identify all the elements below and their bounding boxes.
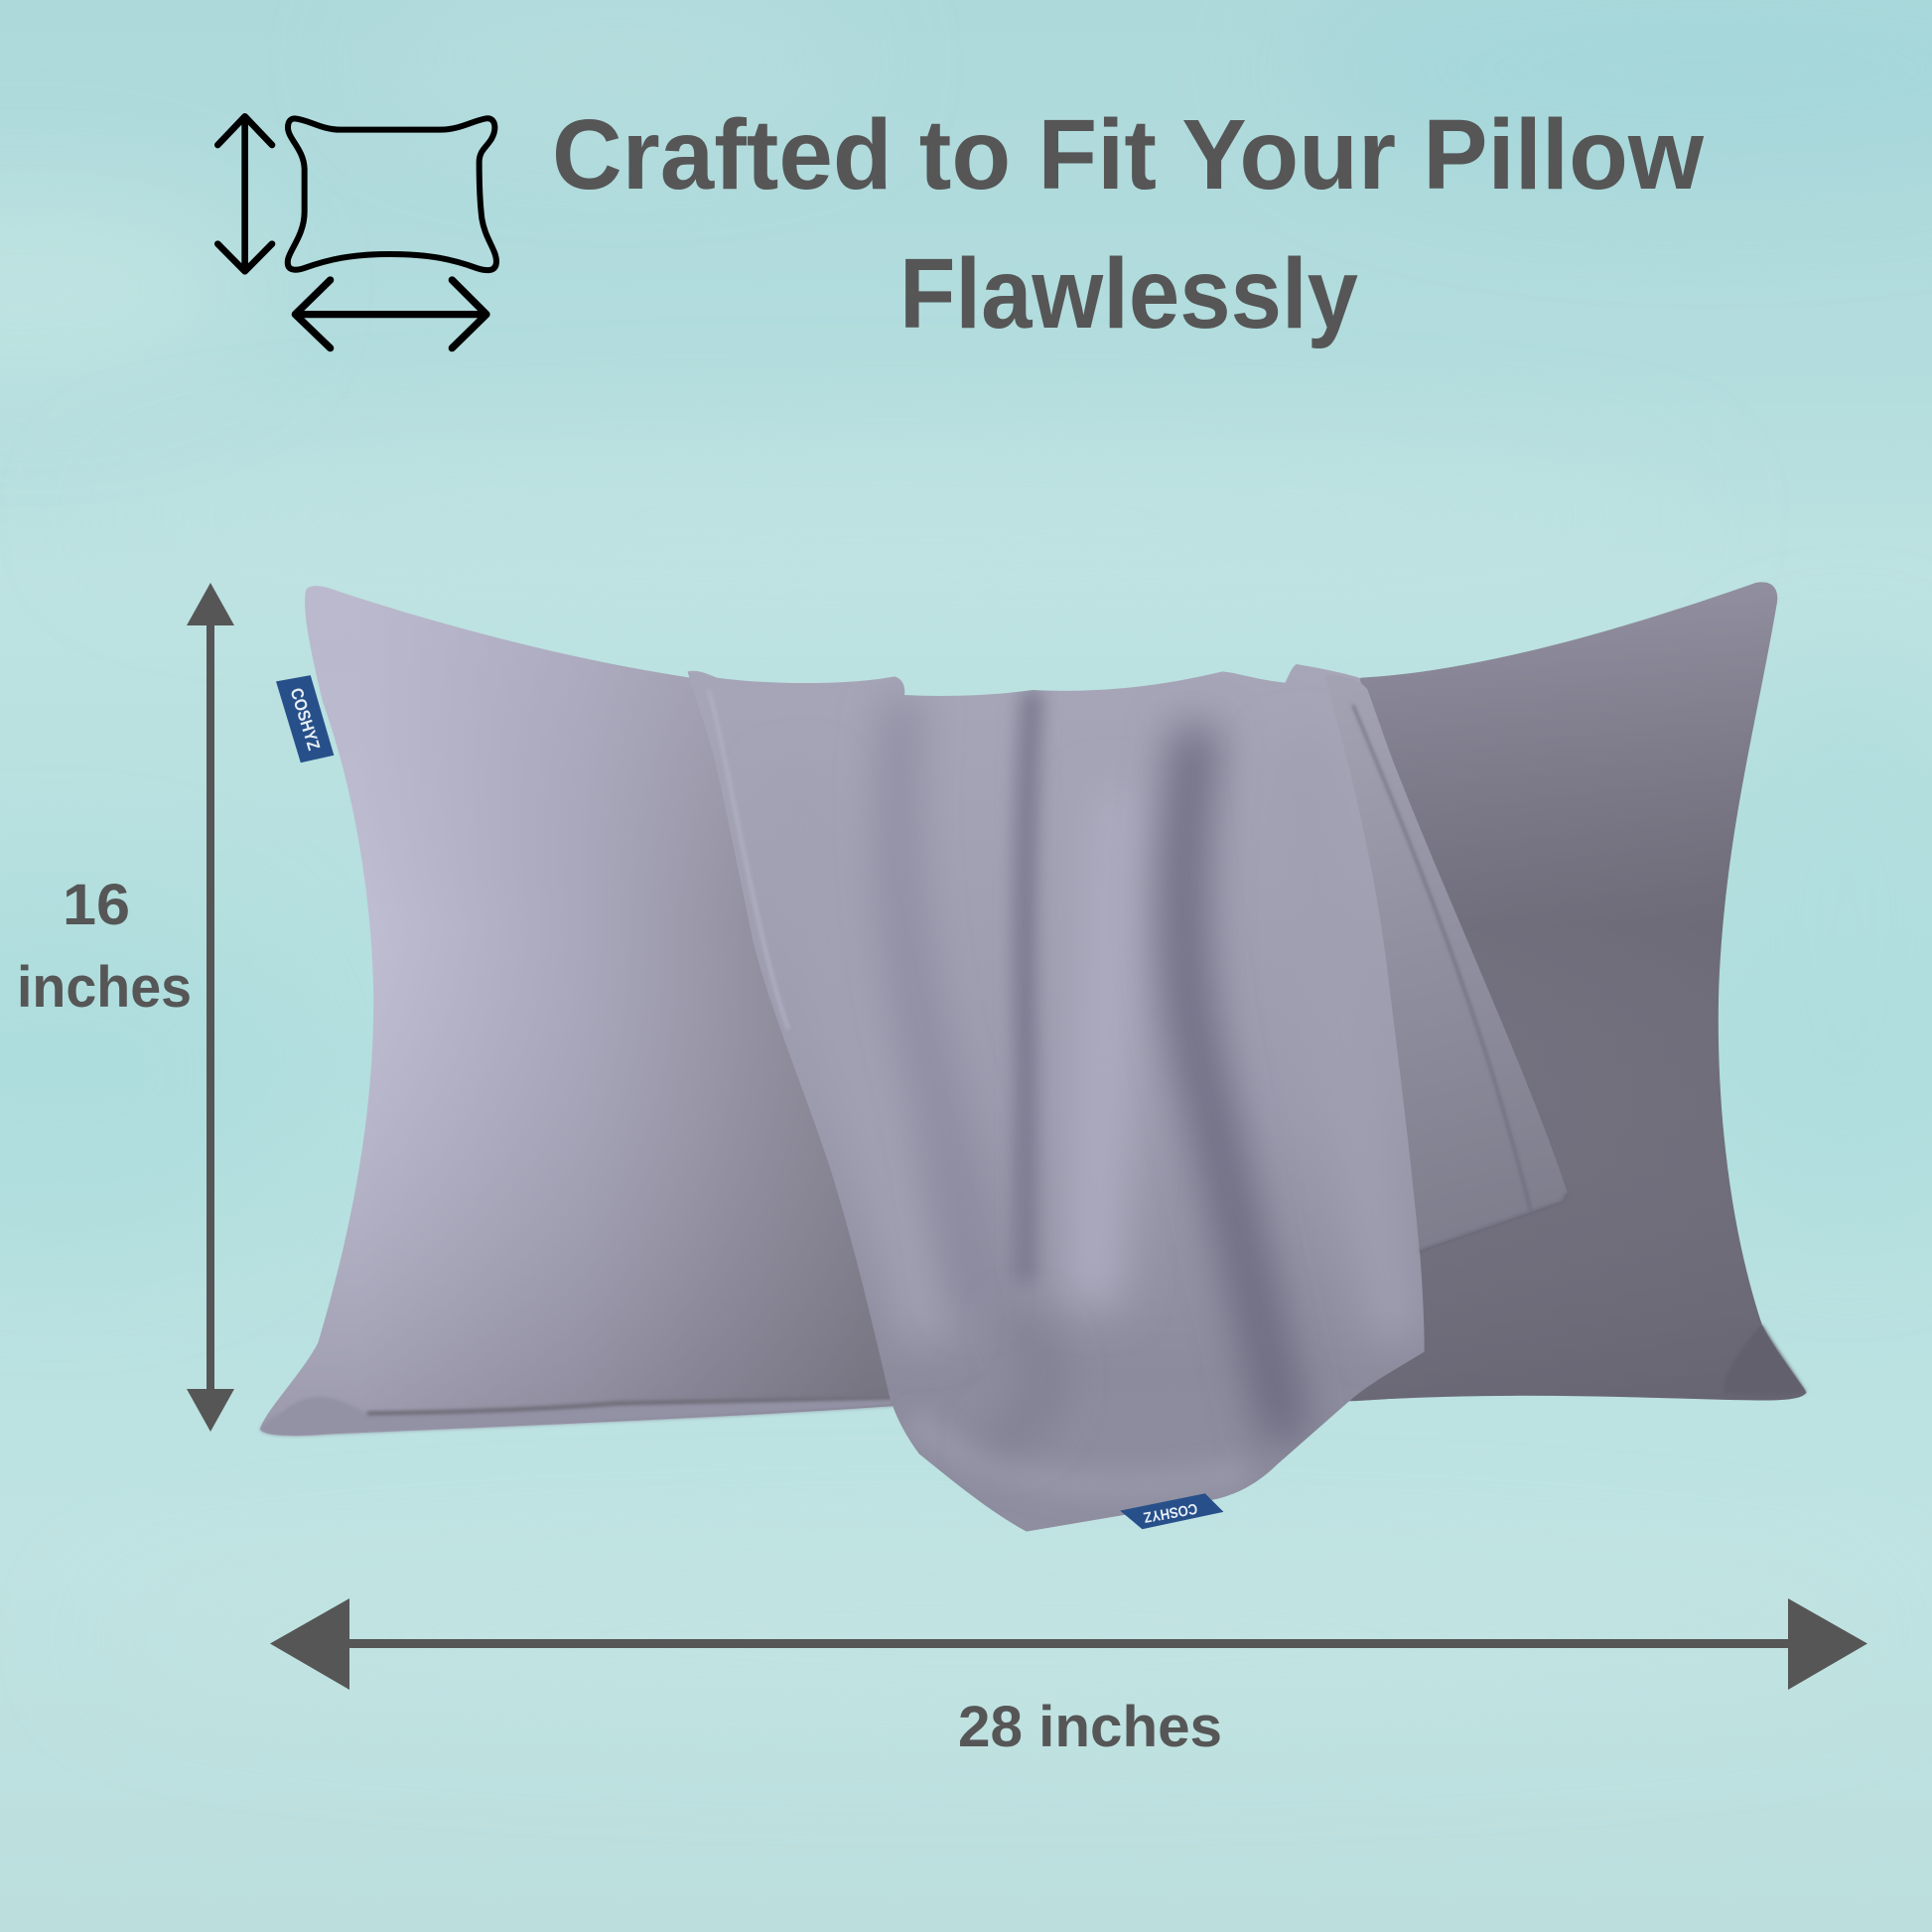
blue tag on pillowcase: [1120, 1493, 1223, 1529]
height label: [17, 873, 192, 1020]
pillowcase side flap: [1324, 675, 1568, 1251]
pillow corner fold: [1723, 1324, 1806, 1395]
title: Flawlessly: [899, 238, 1358, 349]
back pillow shading: [260, 582, 1806, 1436]
height label: 16: [63, 873, 130, 937]
hem highlight along drape edge: [709, 690, 788, 1029]
icon: pillow outline: [288, 118, 496, 270]
pillow photo: [260, 582, 1806, 1553]
bottom seam: [367, 1397, 894, 1414]
title: [552, 99, 1704, 349]
back pillow: [260, 582, 1806, 1436]
icon: horizontal double arrow: [295, 280, 486, 348]
icon: pillow with dimension arrows: [217, 116, 496, 348]
hanging pillowcase: [665, 653, 1453, 1553]
icon: vertical double arrow: [217, 116, 272, 271]
width arrow: [270, 1598, 1867, 1690]
blue tag on pillowcase: COSHYZ: [1143, 1500, 1198, 1525]
height arrow: [187, 583, 234, 1432]
bottom left flange: [260, 1396, 894, 1436]
flap seam: [1353, 705, 1568, 1251]
blue tag on pillow corner: COSHYZ: [287, 685, 325, 753]
title: Crafted to Fit Your Pillow: [552, 99, 1704, 210]
blue tag on pillow corner: [276, 675, 334, 762]
width label: 28 inches: [958, 1695, 1222, 1759]
height label: inches: [17, 955, 192, 1020]
